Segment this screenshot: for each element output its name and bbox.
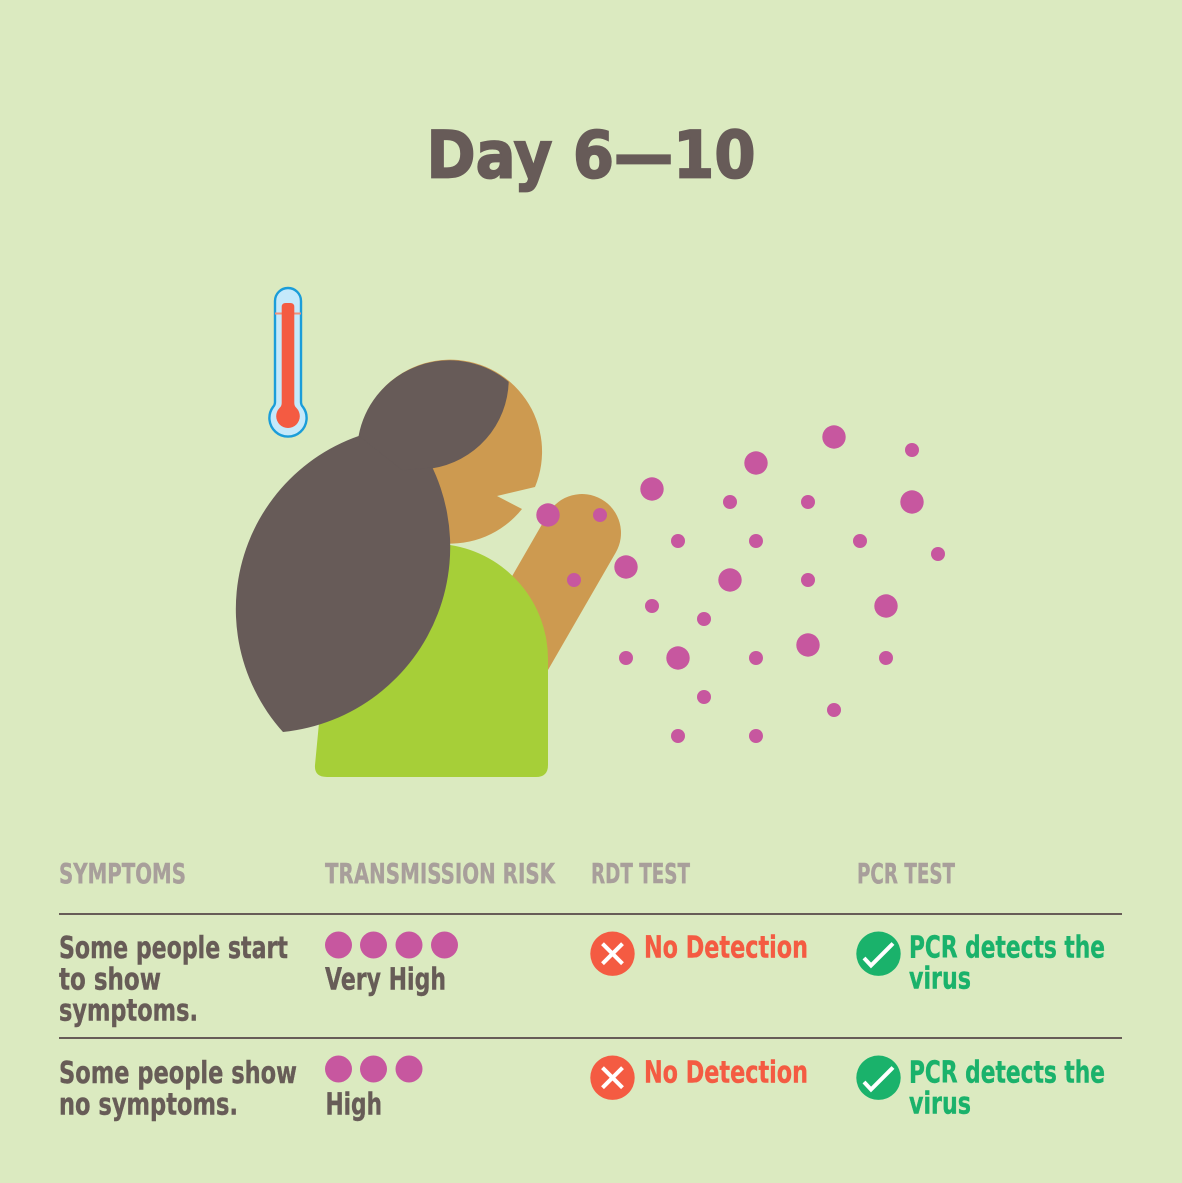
table header: TRANSMISSION RISK [325, 858, 556, 890]
symptoms text [59, 931, 288, 1028]
icon: thermometer [269, 288, 307, 437]
symptoms text: to show [59, 962, 161, 998]
PCR result: PCR detects the [909, 1056, 1105, 1090]
droplets [536, 425, 945, 743]
PCR result: virus [909, 962, 971, 996]
table header: RDT TEST [591, 858, 690, 890]
risk: high: High [326, 1088, 382, 1122]
body [315, 545, 548, 777]
PCR result [856, 1056, 1105, 1122]
symptoms text: Some people start [59, 931, 288, 966]
risk: very high: Very High [325, 962, 446, 998]
row 2 [59, 1056, 1105, 1122]
PCR result: virus [909, 1086, 971, 1122]
row 1 [59, 930, 1105, 1028]
PCR result: PCR detects the [909, 930, 1105, 966]
illustration: coughing person [236, 360, 582, 777]
table header: PCR TEST [857, 858, 955, 890]
table header: SYMPTOMS [59, 858, 186, 890]
symptoms text: Some people show [59, 1056, 297, 1091]
risk: very high [325, 932, 458, 998]
RDT result [590, 930, 808, 976]
RDT result: No Detection [644, 1056, 808, 1090]
table header [59, 858, 955, 890]
symptoms text [59, 1056, 297, 1122]
RDT result [590, 1056, 808, 1100]
hair [236, 361, 508, 732]
PCR result [856, 930, 1105, 996]
risk: high [325, 1056, 422, 1122]
symptoms text: no symptoms. [59, 1088, 238, 1122]
symptoms text: symptoms. [59, 994, 198, 1028]
head [358, 360, 542, 544]
RDT result: No Detection [644, 930, 808, 966]
arm [514, 533, 582, 650]
title: Day 6—10 [426, 118, 756, 194]
